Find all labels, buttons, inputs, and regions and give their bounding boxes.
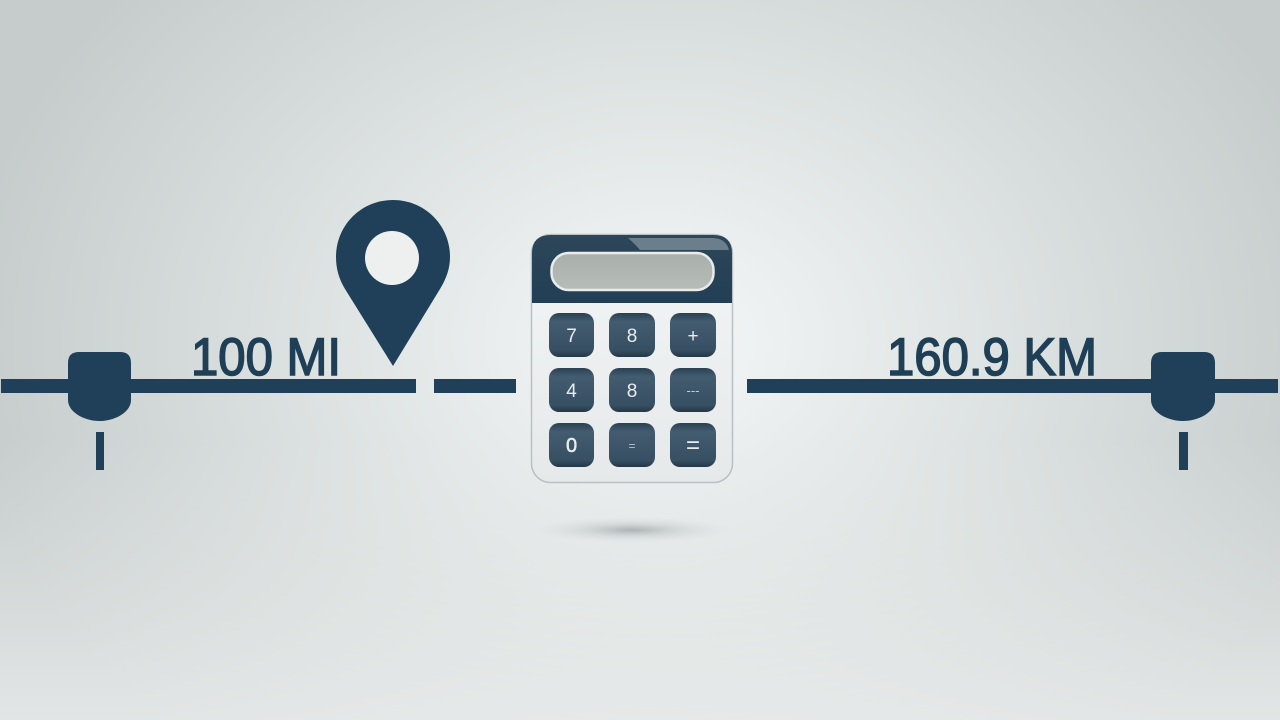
icon: location pin: [336, 200, 450, 366]
icon: calculator: [532, 234, 732, 482]
left distance line: [1, 379, 516, 393]
keypad row 2: 8: [627, 381, 637, 402]
keypad row 3: [549, 423, 716, 467]
keypad row 3: =: [686, 432, 700, 459]
keypad row 1: 7: [566, 326, 577, 347]
display: [552, 253, 714, 290]
left marker: [68, 352, 131, 470]
calculator body: [532, 234, 732, 482]
calculator shadow: [532, 517, 732, 543]
label: 100 MI: 100 MI: [191, 328, 341, 387]
keypad row 1: 8: [627, 326, 637, 347]
keypad row 1: [549, 313, 716, 357]
header highlight: [628, 238, 729, 250]
right marker: [1151, 352, 1215, 470]
keypad row 1: +: [687, 326, 699, 347]
keypad row 3: =: [628, 439, 636, 453]
calculator header: [532, 235, 732, 303]
label: 160.9 KM: 160.9 KM: [887, 328, 1097, 387]
keypad row 2: ---: [686, 383, 700, 398]
keypad row 2: 4: [566, 381, 577, 402]
keypad row 2: [549, 368, 716, 412]
right distance line: [747, 379, 1278, 393]
keypad row 3: 0: [566, 435, 577, 457]
